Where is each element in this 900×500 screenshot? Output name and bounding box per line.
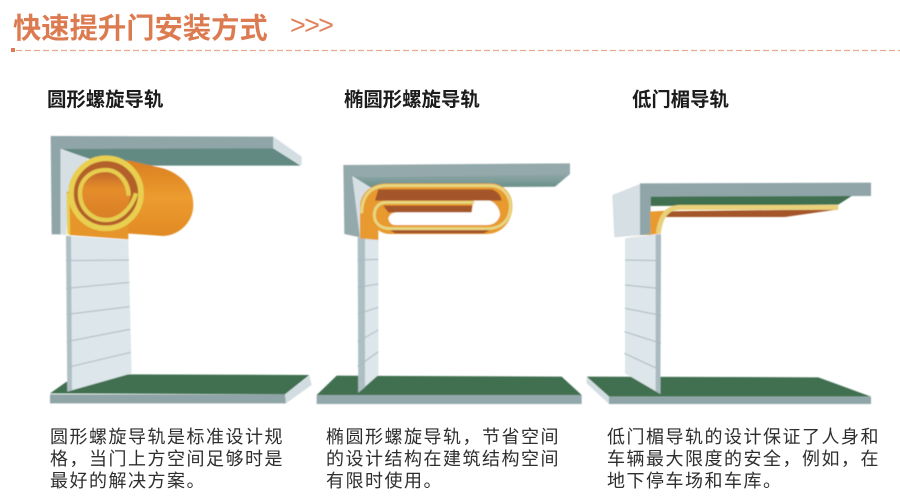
lintel — [612, 183, 871, 237]
arrows: >>> — [290, 10, 332, 40]
text: elliptical track description: 椭圆形螺旋导轨，节省空间 — [326, 427, 560, 447]
heading: low headroom track: 低门楣导轨 — [632, 89, 729, 111]
text: elliptical track description — [326, 427, 560, 491]
diagram: circular track — [50, 136, 312, 403]
title: 快速提升门安装方式 — [13, 12, 268, 44]
text: circular track description: 格，当门上方空间足够时是 — [50, 449, 284, 469]
text: elliptical track description: 有限时使用。 — [326, 471, 443, 491]
floor — [50, 374, 312, 403]
text: low headroom description: 车辆最大限度的安全，例如，在 — [607, 449, 880, 469]
title divider — [11, 48, 900, 52]
text: low headroom description: 地下停车场和车库。 — [607, 471, 782, 491]
text: low headroom description — [607, 427, 880, 491]
door slats — [624, 234, 661, 394]
text: circular track description: 圆形螺旋导轨是标准设计规 — [50, 427, 284, 447]
floor — [587, 377, 871, 404]
text: circular track description — [50, 427, 284, 491]
door slats — [358, 237, 378, 393]
floor — [317, 376, 582, 404]
text: low headroom description: 低门楣导轨的设计保证了人身和 — [607, 427, 880, 447]
lintel — [51, 136, 302, 235]
door slats — [66, 236, 132, 392]
flat track — [624, 207, 838, 239]
text: circular track description: 最好的解决方案。 — [50, 471, 206, 491]
coiled track — [67, 158, 193, 239]
coiled track — [360, 183, 512, 240]
lintel — [343, 163, 570, 237]
diagram: low headroom track — [587, 183, 871, 404]
heading: circular track: 圆形螺旋导轨 — [47, 89, 163, 111]
text: elliptical track description: 的设计结构在建筑结构空间 — [326, 449, 560, 469]
diagram: elliptical track — [317, 163, 582, 404]
heading: elliptical track: 椭圆形螺旋导轨 — [344, 89, 480, 111]
